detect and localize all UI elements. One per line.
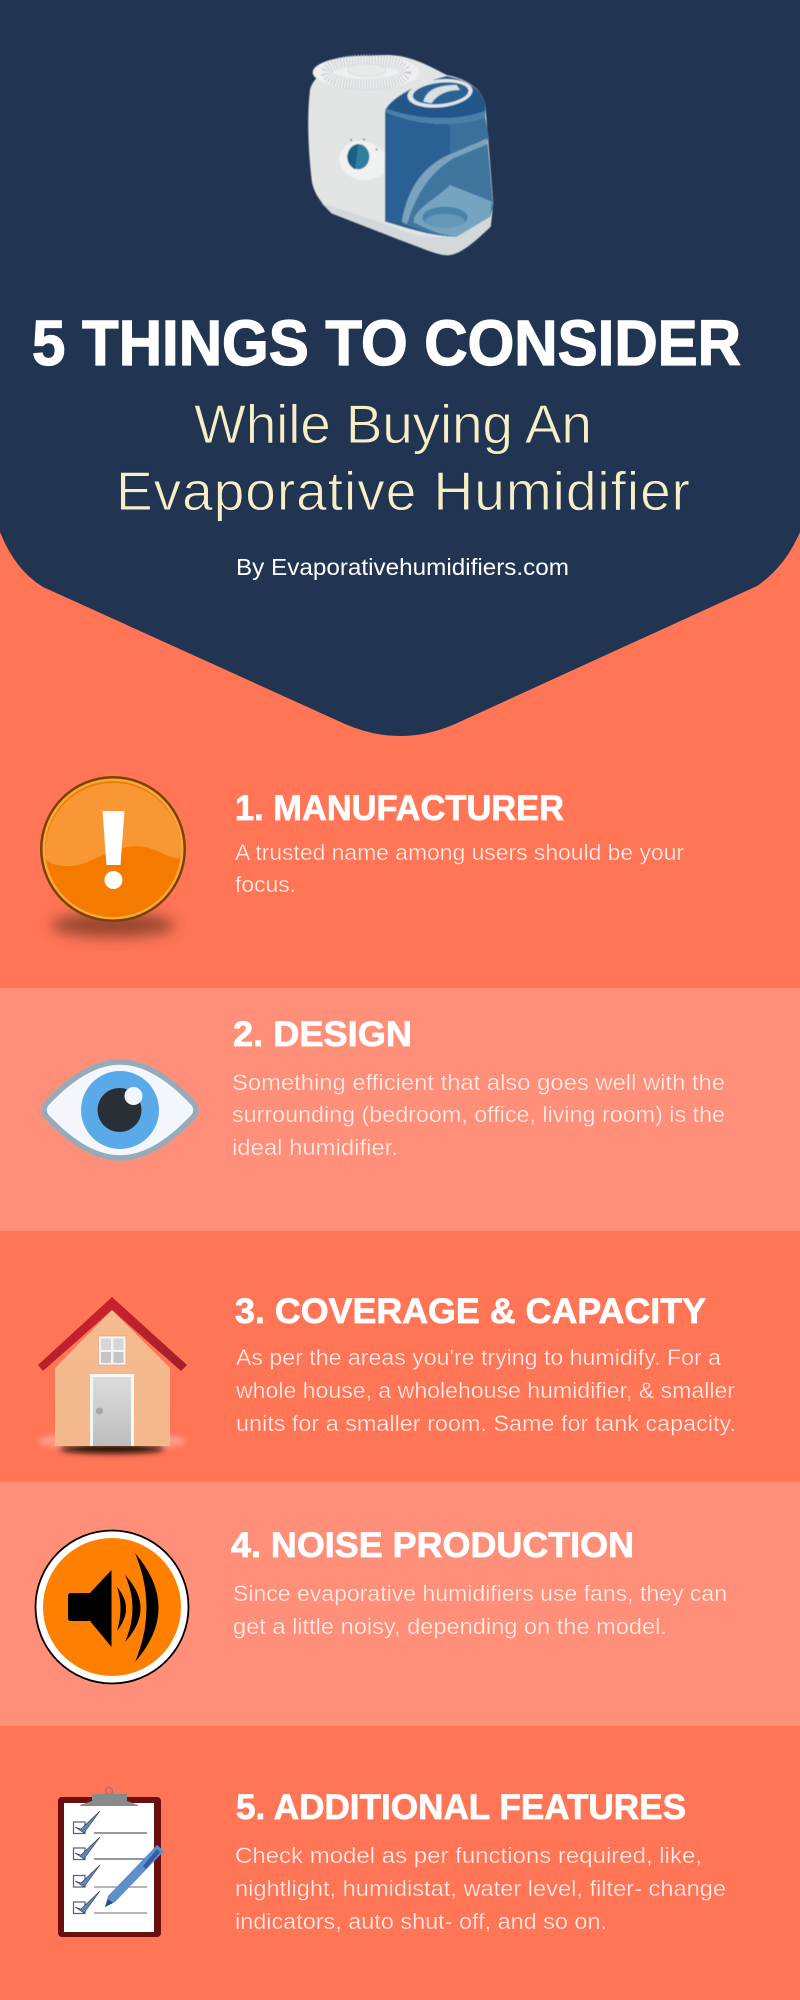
panel: 3 coverage and capacity (38, 1292, 736, 1454)
body text (235, 1843, 726, 1934)
band background (0, 1482, 800, 1726)
body text (235, 1345, 736, 1436)
band background (0, 988, 800, 1231)
panel: 4 noise production (0, 1482, 800, 1726)
body text: ideal humidifier. (232, 1135, 398, 1160)
body text: A trusted name among users should be your (235, 840, 685, 865)
panel: 2 design (0, 988, 800, 1231)
heading: 2. DESIGN (233, 1015, 412, 1054)
body text: Check model as per functions required, like, (235, 1843, 702, 1868)
illustration: evaporative humidifier (308, 55, 493, 255)
heading: 5. ADDITIONAL FEATURES (236, 1788, 686, 1827)
body text (235, 840, 685, 897)
icon: speaker (36, 1530, 188, 1684)
heading: 1. MANUFACTURER (235, 789, 564, 828)
heading: 3. COVERAGE & CAPACITY (235, 1292, 706, 1331)
body text: indicators, auto shut- off, and so on. (235, 1909, 607, 1934)
title: 5 THINGS TO CONSIDER (32, 307, 741, 379)
panel: 5 additional features (58, 1788, 726, 1937)
icon: eye (44, 1062, 196, 1158)
subtitle line 2: Evaporative Humidifier (116, 460, 690, 522)
body text: Since evaporative humidifiers use fans, they can (233, 1581, 727, 1606)
icon: warning exclamation (40, 776, 186, 937)
panel: 1 manufacturer (40, 776, 685, 937)
panel: header (0, 0, 800, 736)
body text: Something efficient that also goes well with the (232, 1070, 725, 1095)
body text (232, 1070, 725, 1160)
body text (233, 1581, 727, 1639)
icon: clipboard checklist (58, 1788, 164, 1937)
body text: get a little noisy, depending on the model. (233, 1614, 667, 1639)
body text: whole house, a wholehouse humidifier, & smaller (235, 1378, 736, 1403)
body text: surrounding (bedroom, office, living room) is the (232, 1102, 725, 1127)
body text: focus. (235, 872, 296, 897)
header navy shield shape (0, 0, 800, 736)
body text: nightlight, humidistat, water level, filter- change (235, 1876, 726, 1901)
byline: By Evaporativehumidifiers.com (236, 554, 569, 580)
body text: As per the areas you're trying to humidify. For a (236, 1345, 721, 1370)
heading: 4. NOISE PRODUCTION (231, 1526, 634, 1565)
body text: units for a smaller room. Same for tank capacity. (236, 1411, 736, 1436)
icon: house (38, 1297, 187, 1454)
subtitle line 1: While Buying An (194, 393, 592, 455)
